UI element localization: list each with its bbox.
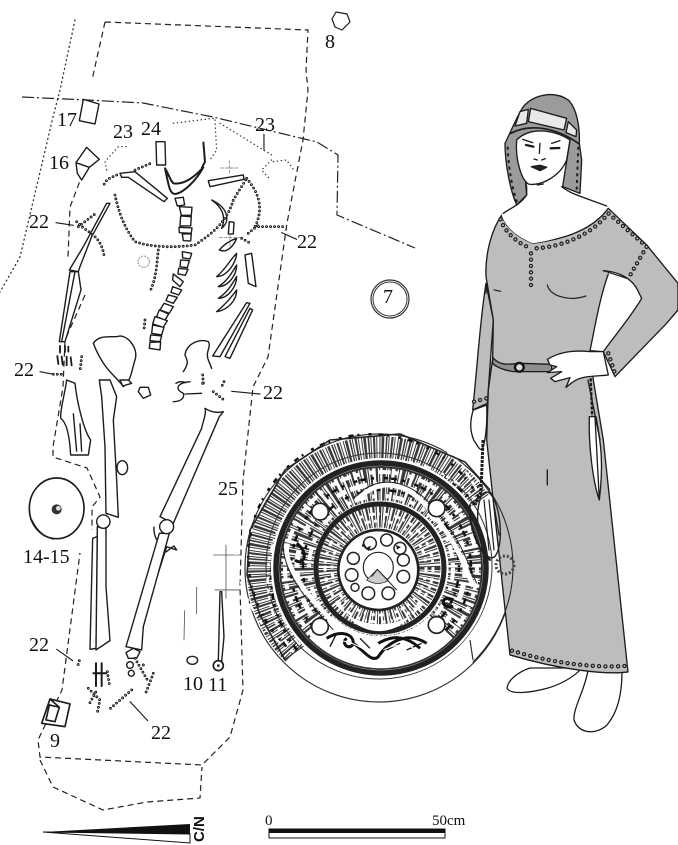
- left forearm: [59, 272, 81, 342]
- scale labels: 0: [265, 813, 272, 829]
- inner dark ring: [316, 504, 444, 632]
- foot bones: [126, 648, 140, 676]
- spine vertebrae: [149, 197, 192, 350]
- number labels: 22: [151, 722, 171, 744]
- ribs: [212, 200, 256, 312]
- find 10: [187, 656, 198, 664]
- central roundel: [363, 552, 393, 582]
- left hand: [61, 380, 91, 455]
- small foot bones: [93, 663, 106, 686]
- left lower leg: [90, 527, 110, 650]
- hand bones small: [57, 346, 72, 365]
- pendant: [470, 491, 514, 574]
- scroll ribbons: [283, 482, 477, 658]
- hem bead trim: [512, 651, 625, 666]
- decorated bronze shield: [236, 419, 513, 702]
- number labels: 9: [50, 730, 60, 752]
- collar bones: [120, 172, 244, 202]
- number labels: 11: [208, 674, 227, 696]
- dress center crease: [547, 380, 600, 485]
- cross marks: [219, 161, 240, 247]
- number labels: 22: [29, 211, 49, 233]
- bead rows: shoulders: [77, 178, 283, 255]
- roundels: [312, 500, 445, 635]
- number labels: 8: [325, 31, 335, 53]
- centre medallion: [338, 530, 418, 610]
- find 9 buckle: [42, 699, 70, 727]
- ankle beads: [88, 658, 153, 713]
- dress body: [486, 208, 678, 673]
- disc 14-15: [29, 478, 84, 539]
- number labels: 22: [263, 382, 283, 404]
- right foot: [574, 670, 622, 732]
- north label: C/N: [191, 816, 208, 842]
- bead rows: chest: [103, 163, 247, 290]
- left knee: [97, 515, 110, 528]
- find 24 plaque: [156, 142, 166, 165]
- head band plaques: [515, 108, 577, 137]
- dress bead trim: [474, 213, 647, 402]
- skeleton lower body: [29, 380, 260, 727]
- number labels: 25: [218, 478, 238, 500]
- ring of small circles: [345, 534, 410, 600]
- ring find: [117, 461, 128, 475]
- find 17 stone: [79, 99, 99, 124]
- right tibia: [126, 533, 169, 650]
- left foot: [507, 668, 582, 693]
- shield rim over dress: [473, 490, 513, 662]
- right knee: [160, 520, 174, 534]
- pelvis right part: [176, 341, 212, 383]
- thin marks: [184, 545, 242, 640]
- middle ornamental band: [280, 467, 482, 669]
- belt pendant strap: [591, 378, 592, 420]
- arm bones right side: [213, 303, 253, 358]
- bottom white field of the band: [321, 627, 441, 652]
- jaw: [165, 142, 205, 194]
- face: [516, 131, 570, 184]
- number labels: 17: [57, 109, 77, 131]
- north arrow: [43, 816, 208, 843]
- small ring and beads: [53, 256, 203, 383]
- neck lines: [503, 183, 607, 213]
- white ring: [271, 458, 491, 678]
- number labels: 14-15: [23, 546, 70, 568]
- inner ornamental band: [325, 514, 433, 622]
- number labels: 7: [383, 286, 393, 308]
- left upper arm: [69, 203, 110, 272]
- body creases: [486, 271, 627, 298]
- find 11 pin: [213, 592, 224, 671]
- left sleeve: [473, 283, 493, 410]
- scale labels: [265, 813, 466, 829]
- find 7 ring: [371, 280, 409, 318]
- inner thin ring: [266, 453, 492, 679]
- number labels: [14, 31, 393, 752]
- number labels: 10: [183, 673, 203, 695]
- head band line: [511, 128, 579, 144]
- woman in reconstructed costume: [470, 95, 678, 732]
- right fibula: [140, 527, 177, 630]
- skeleton upper body: [40, 99, 297, 387]
- arm gap: [590, 271, 642, 352]
- white crescent: [335, 600, 424, 631]
- number labels: 23: [113, 121, 133, 143]
- hood: [505, 95, 582, 205]
- find 8 stone: [332, 12, 350, 30]
- shield outer circles: [245, 434, 513, 702]
- scale labels: 50cm: [432, 813, 466, 829]
- outer decorated band: [236, 419, 490, 660]
- excavation pit outline: [0, 20, 415, 810]
- right femur: [160, 408, 223, 523]
- pelvis fragments: [120, 380, 151, 398]
- left femur: [99, 380, 118, 517]
- leader lines upper: [40, 134, 297, 374]
- left hand: [471, 405, 487, 449]
- number labels: 16: [49, 152, 69, 174]
- scale bar: [265, 813, 466, 838]
- number labels: 22: [14, 359, 34, 381]
- number labels: 24: [141, 118, 161, 140]
- number labels: 23: [255, 114, 275, 136]
- knife sheath: [589, 417, 602, 500]
- right hand: [547, 351, 608, 387]
- beads near pelvis: [77, 382, 224, 667]
- find 16 stone: [76, 147, 99, 180]
- chain: [475, 440, 483, 505]
- dotted lines near the head: [105, 118, 295, 180]
- bottom spiral scrolls: [295, 543, 453, 658]
- neck and chest: [502, 163, 607, 243]
- number labels: 22: [29, 634, 49, 656]
- number labels: 22: [297, 231, 317, 253]
- pelvis: [93, 336, 136, 387]
- facial features: [523, 139, 560, 185]
- leader lines lower: [57, 391, 260, 721]
- belt: [493, 357, 552, 372]
- dark main ring: [276, 463, 486, 673]
- hood stitching: [508, 147, 578, 203]
